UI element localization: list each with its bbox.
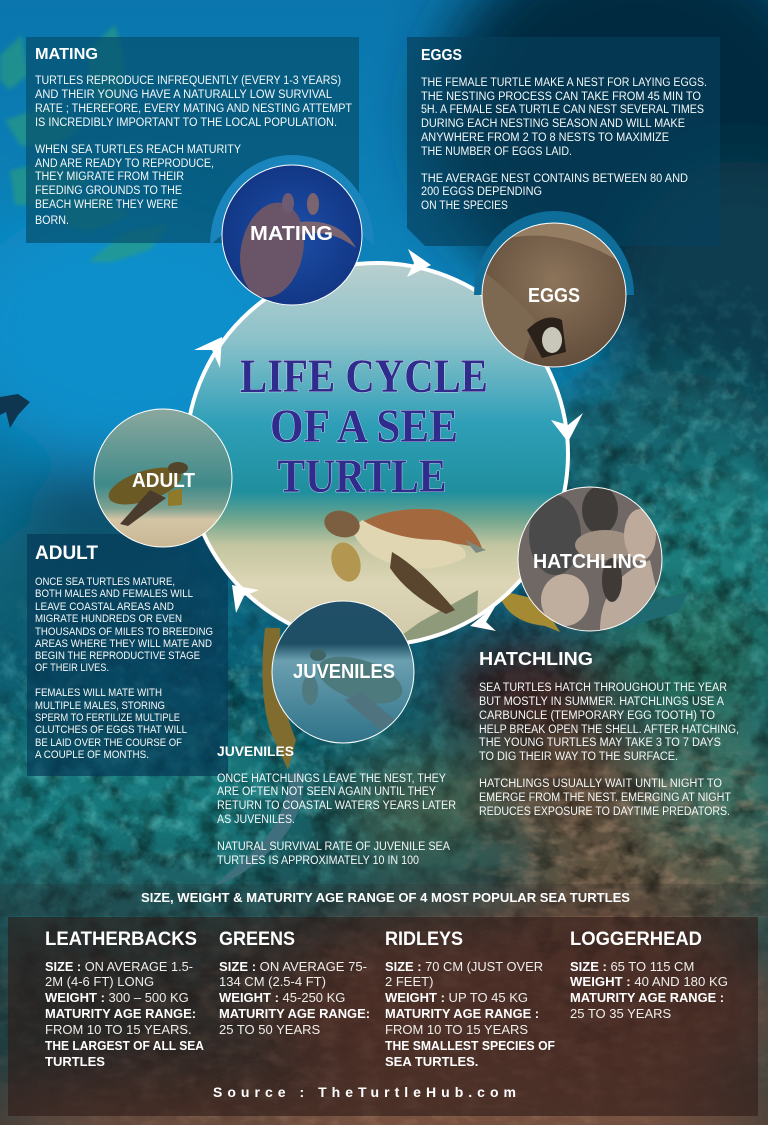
panel: species table (8, 917, 758, 1116)
text: eggs description: THE FEMALE TURTLE MAKE A NEST FOR LAYING EGGS. (421, 77, 707, 89)
label: mating: MATING (250, 223, 333, 245)
text: eggs description: THE NUMBER OF EGGS LAID. (421, 146, 572, 158)
text: adult description: BE LAID OVER THE COURSE OF (35, 737, 182, 749)
column: leatherbacks: SIZE : ON AVERAGE 1.5- (45, 959, 193, 974)
heading: mating: MATING (35, 46, 98, 63)
text: eggs description: DURING EACH NESTING SEASON AND WILL MAKE (421, 118, 685, 130)
column: greens: WEIGHT : 45-250 KG (219, 990, 345, 1005)
text: mating description: IS INCREDIBLY IMPORTANT TO THE LOCAL POPULATION. (35, 117, 337, 129)
text: adult description: BEGIN THE REPRODUCTIVE STAGE (35, 650, 200, 662)
heading: adult: ADULT (35, 543, 98, 564)
text: adult description: THOUSANDS OF MILES TO BREEDING (35, 626, 213, 638)
column: greens: MATURITY AGE RANGE: (219, 1006, 370, 1021)
text: adult description: A COUPLE OF MONTHS. (35, 749, 149, 761)
column: leatherbacks: WEIGHT : 300 – 500 KG (45, 990, 189, 1005)
text: adult description: MIGRATE HUNDREDS OR EVEN (35, 613, 182, 625)
text: adult description (35, 576, 213, 761)
photo: adult turtle (104, 460, 188, 526)
text: hatchling description: TO DIG THEIR WAY TO THE SURFACE. (479, 751, 678, 763)
arrow: adult to mating (194, 337, 222, 368)
text: mating description: BEACH WHERE THEY WERE (35, 199, 178, 211)
text: hatchling description: HATCHLINGS USUALLY WAIT UNTIL NIGHT TO (479, 778, 722, 790)
stage circle: juveniles (272, 601, 414, 743)
column: ridleys: FROM 10 TO 15 YEARS (385, 1022, 528, 1037)
text: mating description: WHEN SEA TURTLES REACH MATURITY (35, 144, 241, 156)
text: adult description: SPERM TO FERTILIZE MULTIPLE (35, 712, 180, 724)
text: hatchling description: SEA TURTLES HATCH THROUGHOUT THE YEAR (479, 682, 727, 694)
column: leatherbacks: LEATHERBACKS (45, 929, 197, 950)
text: mating description: RATE ; THEREFORE, EVERY MATING AND NESTING ATTEMPT (35, 103, 352, 115)
column: ridleys: 2 FEET) (385, 974, 433, 989)
column: loggerhead: 25 TO 35 YEARS (570, 1006, 672, 1021)
column: ridleys (385, 929, 555, 1069)
text: juveniles description (217, 773, 456, 867)
label: hatchling: HATCHLING (533, 551, 647, 573)
text: eggs description: 5H. A FEMALE SEA TURTLE CAN NEST SEVERAL TIMES (421, 104, 704, 116)
column: greens: GREENS (219, 929, 295, 950)
text block: hatchling (479, 649, 739, 818)
text: juveniles description: NATURAL SURVIVAL RATE OF JUVENILE SEA (217, 841, 450, 853)
text: adult description: ONCE SEA TURTLES MATURE, (35, 576, 175, 588)
title (240, 350, 488, 503)
label: juveniles: JUVENILES (293, 661, 395, 683)
column: leatherbacks: MATURITY AGE RANGE: (45, 1006, 196, 1021)
text: adult description: CLUTCHES OF EGGS THAT WILL (35, 724, 187, 736)
stage circle: adult (94, 409, 232, 547)
column: ridleys: SEA TURTLES. (385, 1054, 478, 1069)
column: loggerhead (570, 929, 728, 1021)
text: mating description: TURTLES REPRODUCE INFREQUENTLY (EVERY 1-3 YEARS) (35, 75, 341, 87)
column: greens: SIZE : ON AVERAGE 75- (219, 959, 367, 974)
text: mating description: AND THEIR YOUNG HAVE A NATURALLY LOW SURVIVAL (35, 89, 333, 101)
source: Source : TheTurtleHub.com (213, 1084, 516, 1100)
text: juveniles description: ONCE HATCHLINGS LEAVE THE NEST, THEY (217, 773, 446, 785)
text: eggs description (421, 77, 707, 212)
photo: hatching eggs (529, 486, 665, 630)
heading: eggs: EGGS (421, 47, 462, 64)
label: adult: ADULT (132, 470, 195, 492)
column: ridleys: RIDLEYS (385, 929, 463, 950)
text block: juveniles (217, 743, 456, 867)
text: eggs description: THE AVERAGE NEST CONTAINS BETWEEN 80 AND (421, 173, 688, 185)
column: ridleys: MATURITY AGE RANGE : (385, 1006, 539, 1021)
heading: species comparison: SIZE, WEIGHT & MATURITY AGE RANGE OF 4 MOST POPULAR SEA TURTLES (141, 890, 630, 905)
heading: juveniles: JUVENILES (217, 743, 294, 759)
decoration: dark fish silhouette (0, 394, 30, 428)
stage circle: eggs (474, 211, 634, 370)
text: eggs description: THE NESTING PROCESS CAN TAKE FROM 45 MIN TO (421, 91, 701, 103)
decoration: hawksbill turtle behind the circles (214, 590, 688, 886)
column: ridleys: WEIGHT : UP TO 45 KG (385, 990, 528, 1005)
stage circle: mating (210, 155, 374, 305)
column: leatherbacks: 2M (4-6 FT) LONG (45, 974, 154, 989)
text: adult description: FEMALES WILL MATE WITH (35, 687, 162, 699)
label: eggs: EGGS (528, 285, 580, 307)
text: juveniles description: AS JUVENILES. (217, 814, 295, 826)
text: juveniles description: ARE OFTEN NOT SEEN AGAIN UNTIL THEY (217, 786, 436, 798)
text: juveniles description: RETURN TO COASTAL WATERS YEARS LATER (217, 800, 456, 812)
text: mating description (35, 75, 352, 227)
panel: eggs (407, 37, 720, 246)
column: greens (219, 929, 370, 1037)
column: loggerhead: MATURITY AGE RANGE : (570, 990, 724, 1005)
column: ridleys: SIZE : 70 CM (JUST OVER (385, 959, 543, 974)
text: eggs description: ON THE SPECIES (421, 200, 508, 212)
arrow: hatchling to juveniles (470, 605, 496, 631)
text: adult description: BOTH MALES AND FEMALES WILL (35, 588, 193, 600)
text: juveniles description: TURTLES IS APPROXIMATELY 10 IN 100 (217, 855, 419, 867)
heading: species comparison (0, 884, 768, 916)
text: eggs description: 200 EGGS DEPENDING (421, 186, 542, 198)
photo: nest with eggs (482, 224, 616, 360)
text: hatchling description: BUT MOSTLY IN SUMMER. HATCHLINGS USE A (479, 696, 724, 708)
decoration: green fish school (0, 25, 170, 262)
panel: mating (26, 37, 359, 243)
text: mating description: THEY MIGRATE FROM THEIR (35, 171, 184, 183)
title: OF A SEE (270, 400, 458, 453)
panel: main circle with title (186, 263, 568, 660)
heading: hatchling: HATCHLING (479, 649, 593, 669)
photo: mating turtles (240, 193, 356, 298)
text: hatchling description: THE YOUNG TURTLES MAY TAKE 3 TO 7 DAYS (479, 737, 721, 749)
column: greens: 25 TO 50 YEARS (219, 1022, 321, 1037)
text: hatchling description: REDUCES EXPOSURE TO DAYTIME PREDATORS. (479, 806, 730, 818)
text: hatchling description: EMERGE FROM THE NEST. EMERGING AT NIGHT (479, 792, 731, 804)
text: mating description: BORN. (35, 215, 69, 227)
column: leatherbacks: THE LARGEST OF ALL SEA (45, 1038, 205, 1053)
column: greens: 134 CM (2.5-4 FT) (219, 974, 326, 989)
arrow: mating to eggs (407, 249, 431, 277)
column: ridleys: THE SMALLEST SPECIES OF (385, 1038, 555, 1053)
text: adult description: AREAS WHERE THEY WILL MATE AND (35, 638, 212, 650)
photo: juvenile turtle (302, 647, 408, 730)
text: adult description: MULTIPLE MALES, STORING (35, 700, 165, 712)
text: hatchling description: HELP BREAK OPEN THE SHELL. AFTER HATCHING, (479, 724, 739, 736)
arrow: eggs to hatchling (551, 413, 583, 442)
panel: adult (27, 534, 228, 776)
title: LIFE CYCLE (240, 350, 488, 403)
text: hatchling description: CARBUNCLE (TEMPORARY EGG TOOTH) TO (479, 710, 715, 722)
column: loggerhead: SIZE : 65 TO 115 CM (570, 959, 694, 974)
illustration: swimming turtle (324, 508, 486, 640)
title: TURTLE (278, 450, 446, 503)
text: adult description: LEAVE COASTAL AREAS AND (35, 601, 174, 613)
column: leatherbacks (45, 929, 205, 1069)
stage circle: hatchling (518, 486, 665, 631)
text: hatchling description (479, 682, 739, 818)
arrow: juveniles to adult (232, 585, 259, 613)
text: mating description: AND ARE READY TO REPRODUCE, (35, 158, 214, 170)
column: loggerhead: WEIGHT : 40 AND 180 KG (570, 974, 728, 989)
column: leatherbacks: FROM 10 TO 15 YEARS. (45, 1022, 192, 1037)
text: adult description: OF THEIR LIVES. (35, 662, 109, 674)
column: loggerhead: LOGGERHEAD (570, 929, 702, 950)
text: eggs description: ANYWHERE FROM 2 TO 8 NESTS TO MAXIMIZE (421, 132, 669, 144)
text: mating description: FEEDING GROUNDS TO THE (35, 185, 182, 197)
column: leatherbacks: TURTLES (45, 1054, 105, 1069)
